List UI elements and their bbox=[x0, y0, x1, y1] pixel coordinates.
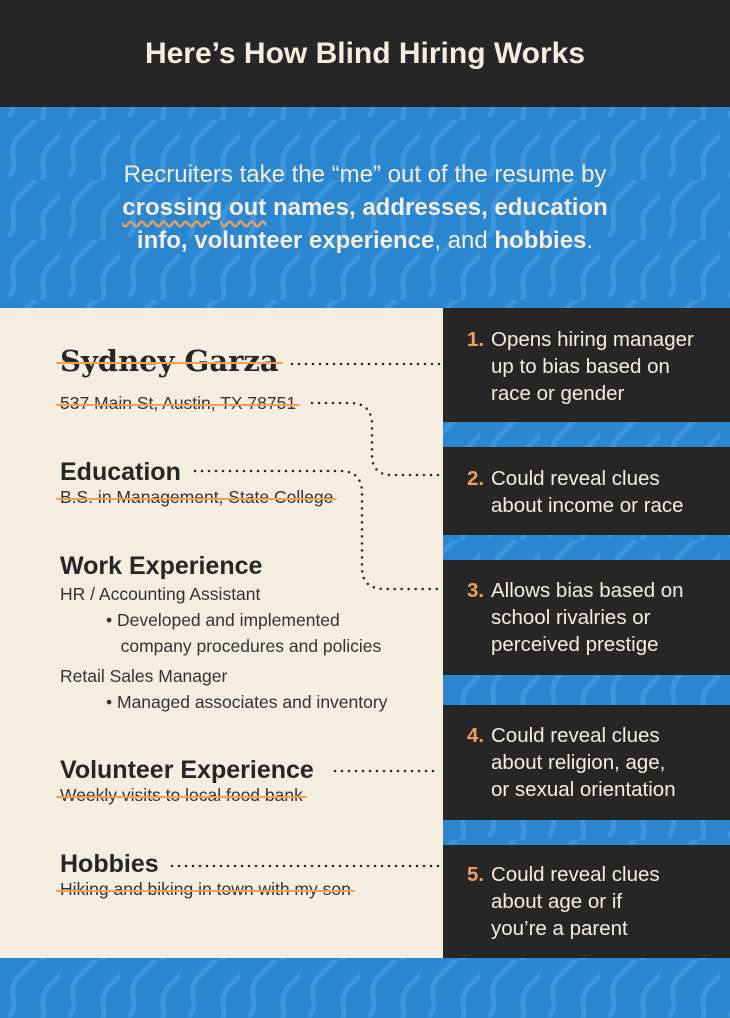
box 1: 1. bbox=[467, 328, 484, 351]
box 4: 4. bbox=[467, 724, 484, 747]
box 2 bbox=[443, 447, 730, 535]
box 5: Could reveal clues bbox=[491, 863, 660, 886]
intro text: names, addresses, education bbox=[273, 194, 608, 221]
work experience bbox=[60, 552, 388, 712]
education bbox=[56, 458, 337, 507]
address: 537 Main St, Austin, TX 78751 bbox=[60, 393, 296, 413]
box 5: you’re a parent bbox=[491, 917, 628, 940]
box 3 bbox=[443, 560, 730, 675]
work experience: company procedures and policies bbox=[121, 636, 381, 656]
volunteer: Weekly visits to local food bank bbox=[60, 785, 303, 805]
box 1: race or gender bbox=[491, 382, 624, 405]
volunteer: Volunteer Experience bbox=[60, 756, 314, 784]
box 1: up to bias based on bbox=[491, 355, 670, 378]
box 5 bbox=[443, 845, 730, 958]
box 5: 5. bbox=[467, 863, 484, 886]
hobbies: Hiking and biking in town with my son bbox=[60, 879, 351, 899]
box 3: Allows bias based on bbox=[491, 579, 684, 602]
work experience: Retail Sales Manager bbox=[60, 666, 227, 686]
box 3: school rivalries or bbox=[491, 606, 650, 629]
volunteer bbox=[56, 756, 314, 805]
work experience: HR / Accounting Assistant bbox=[60, 584, 260, 604]
hobbies: Hobbies bbox=[60, 850, 159, 878]
box 2: Could reveal clues bbox=[491, 467, 660, 490]
box 1 bbox=[443, 308, 730, 422]
intro text: Recruiters take the “me” out of the resume by bbox=[124, 161, 606, 188]
work experience: Work Experience bbox=[60, 552, 262, 580]
intro text bbox=[122, 161, 608, 254]
box 2: 2. bbox=[467, 467, 484, 490]
work experience: • Managed associates and inventory bbox=[106, 692, 387, 712]
box 1: Opens hiring manager bbox=[491, 328, 694, 351]
box 3: 3. bbox=[467, 579, 484, 602]
box 2: about income or race bbox=[491, 494, 684, 517]
education: B.S. in Management, State College bbox=[60, 487, 333, 507]
box 5: about age or if bbox=[491, 890, 622, 913]
resume panel bbox=[0, 308, 443, 958]
intro text: info, volunteer experience, and hobbies. bbox=[137, 227, 593, 254]
name: Sydney Garza bbox=[60, 344, 279, 378]
box 4: or sexual orientation bbox=[491, 778, 676, 801]
box 3: perceived prestige bbox=[491, 633, 659, 656]
box 4: Could reveal clues bbox=[491, 724, 660, 747]
education: Education bbox=[60, 458, 181, 486]
box 4: about religion, age, bbox=[491, 751, 665, 774]
work experience: • Developed and implemented bbox=[106, 610, 340, 630]
intro text: crossing out bbox=[122, 194, 266, 221]
hobbies bbox=[56, 850, 355, 899]
header: Here’s How Blind Hiring Works bbox=[145, 37, 585, 70]
box 4 bbox=[443, 705, 730, 820]
dotted connectors bbox=[170, 362, 440, 868]
header bbox=[0, 0, 730, 107]
